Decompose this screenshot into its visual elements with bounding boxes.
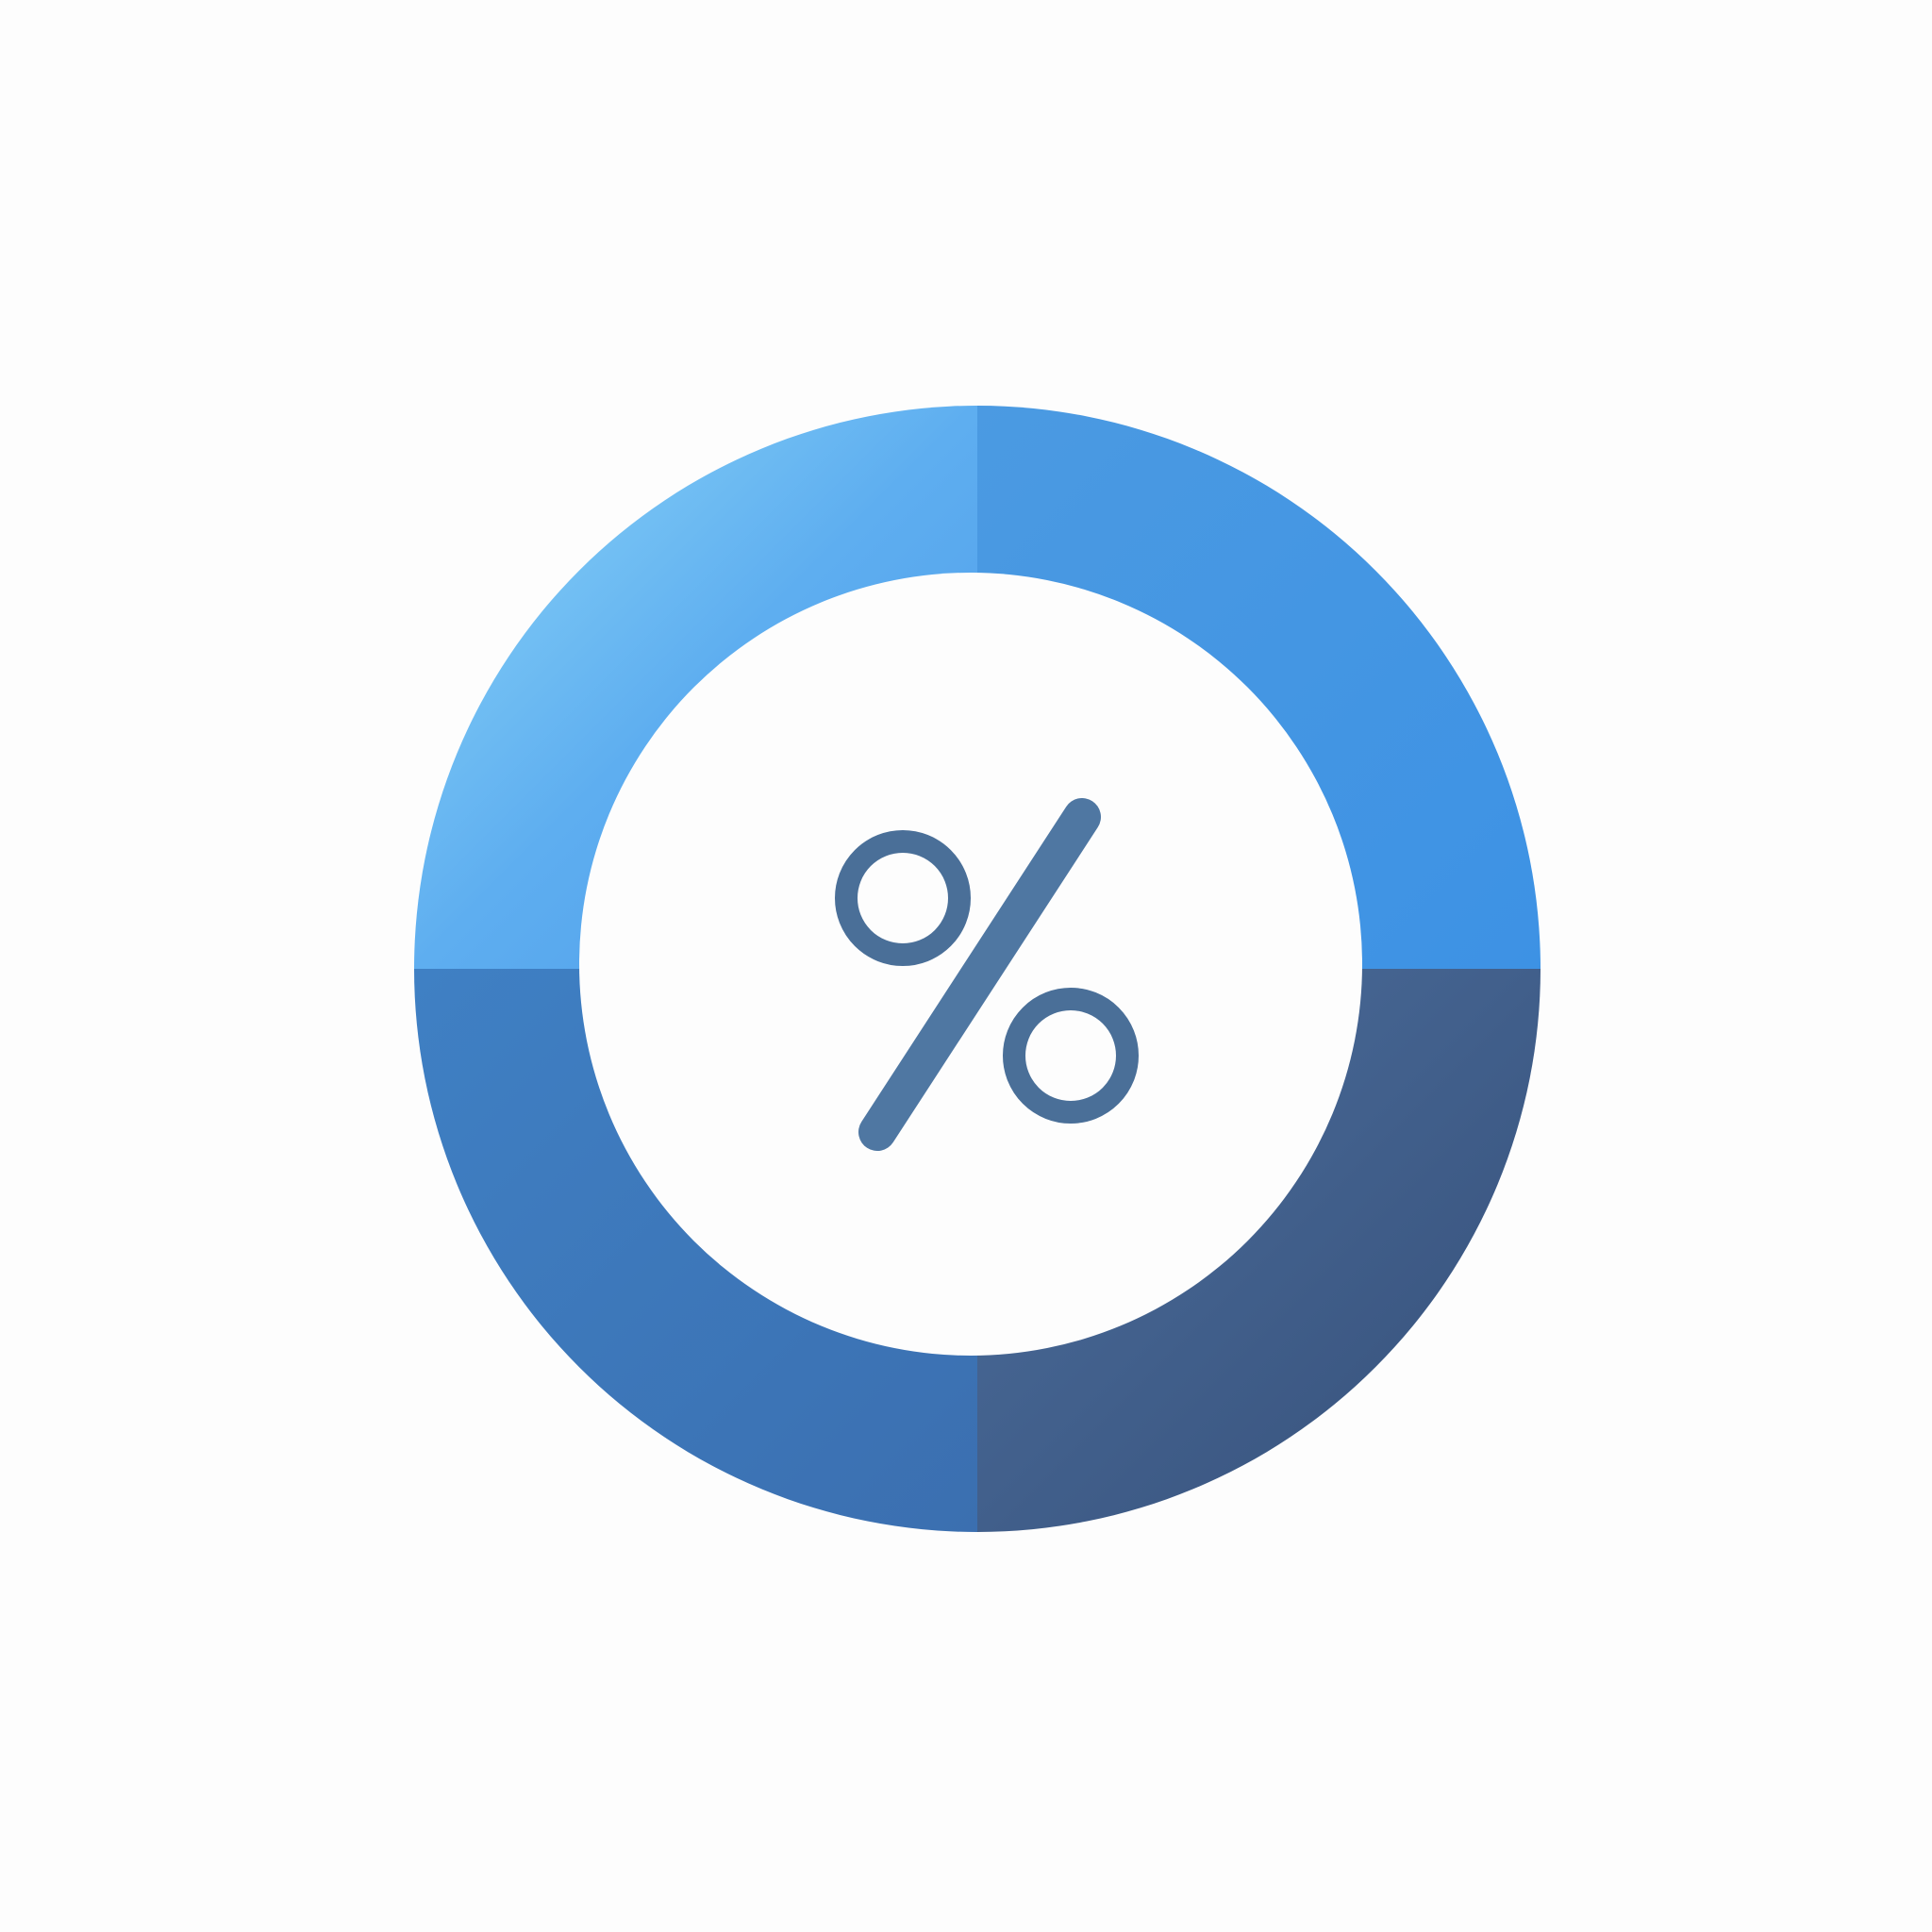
segment: bottom-right	[977, 969, 1541, 1532]
ring	[414, 406, 1541, 1532]
ring hole	[579, 573, 1362, 1356]
icon: slash	[877, 817, 1082, 1132]
segment: top-left	[414, 406, 977, 969]
segment: top-right	[977, 406, 1541, 969]
segment: bottom-left	[414, 969, 977, 1532]
icon: bottom circle	[1014, 999, 1127, 1112]
icon: top circle	[846, 841, 959, 955]
percent sign	[846, 817, 1127, 1132]
